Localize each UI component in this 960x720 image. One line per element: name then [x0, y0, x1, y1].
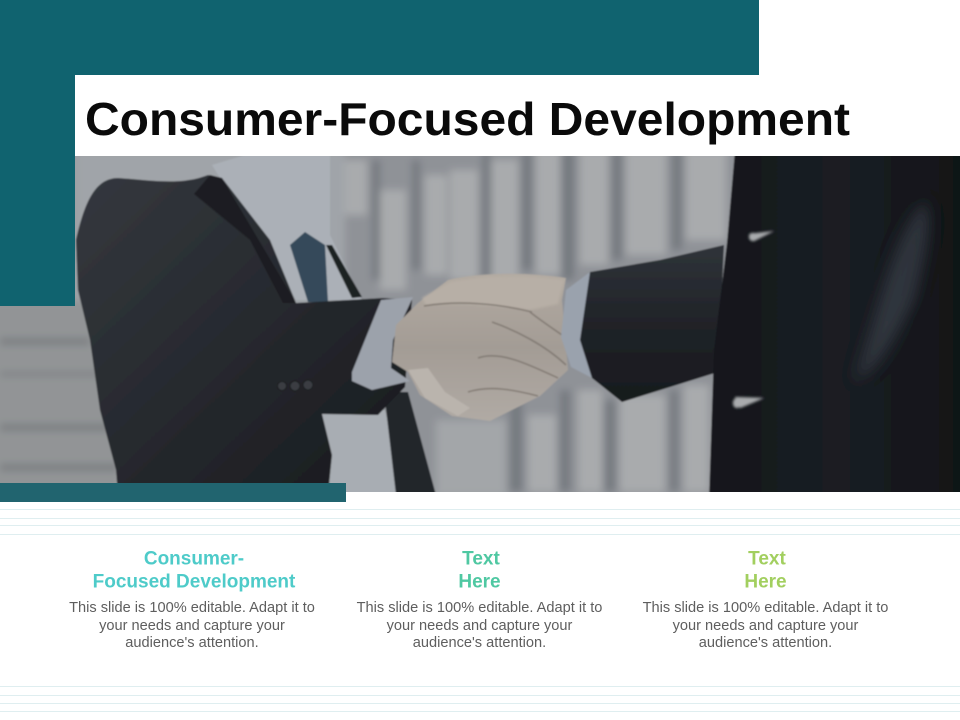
photo: handshake [0, 150, 960, 500]
band: top teal block [0, 0, 759, 306]
blurred buildings [0, 150, 740, 495]
heading: column 3: Here [744, 572, 787, 592]
man left: jacket [76, 175, 412, 495]
text: column 1: audience's attention. [125, 635, 259, 651]
text: column 1: This slide is 100% editable. Adapt it to [69, 600, 315, 616]
column 3 [643, 548, 888, 651]
right shirt cuff [561, 272, 592, 378]
text: column 2: This slide is 100% editable. Adapt it to [357, 600, 602, 616]
heading: column 2: Text [462, 548, 500, 570]
heading: column 2: Here [458, 572, 501, 592]
shirt cuff [352, 297, 413, 390]
text: column 3: your needs and capture your [673, 618, 859, 634]
heading: column 1: Focused Development [93, 572, 296, 592]
decorative lines [0, 510, 960, 712]
hand [392, 274, 568, 421]
man left: tie [290, 232, 328, 302]
right jacket [709, 150, 960, 500]
man left: shirt [212, 150, 362, 300]
column 1 [69, 548, 315, 651]
right sleeve [580, 245, 724, 402]
text: column 1: your needs and capture your [99, 618, 285, 634]
jacket buttons [278, 380, 312, 390]
text: column 3: audience's attention. [699, 635, 832, 651]
right jacket buttons [733, 231, 774, 408]
text: column 3: This slide is 100% editable. Adapt it to [643, 600, 888, 616]
title: Consumer-Focused Development [85, 93, 850, 145]
text: column 2: audience's attention. [413, 635, 546, 651]
text: column 2: your needs and capture your [387, 618, 573, 634]
band: lower teal bar [0, 483, 346, 502]
heading: column 3: Text [748, 548, 786, 570]
heading: column 1: Consumer- [144, 548, 244, 570]
column 2 [357, 548, 602, 651]
